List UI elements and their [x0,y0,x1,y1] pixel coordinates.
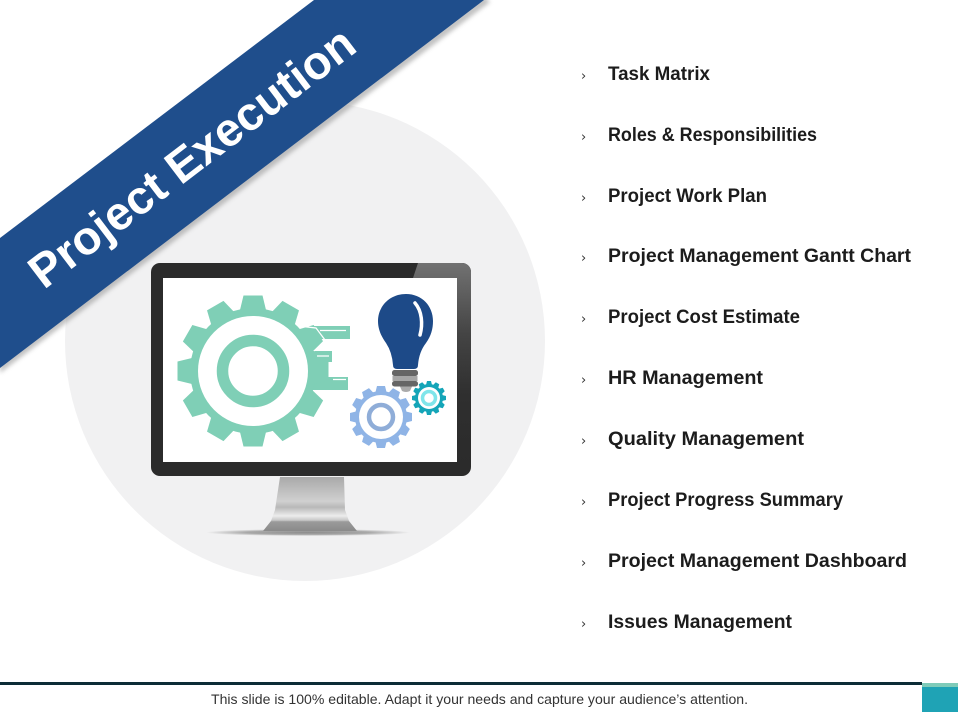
monitor bezel [151,263,471,476]
footer rule [0,682,922,685]
item: Project Cost Estimate: Project Cost Estimate [608,306,800,328]
bulb glass [378,294,433,369]
large green gear [178,296,350,446]
item: Task Matrix: › [581,69,586,84]
banner [0,0,490,373]
item: Project Work Plan: › [581,191,586,206]
item: Roles & Responsibilities: › [581,130,586,145]
gear body [178,296,332,446]
item: Project Management Dashboard: Project Management Dashboard [608,550,907,572]
item: Issues Management: › [581,617,586,632]
monitor gloss [413,263,471,466]
item: Quality Management: › [581,434,586,449]
background circle [65,101,545,581]
item: Project Work Plan: Project Work Plan [608,185,767,207]
footer square [922,683,958,712]
bulb highlight [415,303,422,335]
monitor stand shadow [206,529,410,536]
small blue gear [350,386,412,448]
item: HR Management: HR Management [608,367,764,389]
monitor [151,263,471,536]
item: Project Progress Summary: Project Progress Summary [608,489,843,511]
title: Project Execution [18,16,365,298]
light bulb [378,294,433,392]
item: Quality Management: Quality Management [608,428,805,450]
item: Roles & Responsibilities: Roles & Responsibilities [608,124,817,146]
footer note: This slide is 100% editable. Adapt it your needs and capture your audience’s attention. [211,691,748,707]
item: Project Management Gantt Chart: › [581,251,586,266]
monitor screen [163,278,457,462]
footer [0,682,958,712]
item: Project Progress Summary: › [581,495,586,510]
gear data tabs [312,326,350,390]
banner ribbon [0,0,484,368]
item: Project Management Dashboard: › [581,556,586,571]
item: HR Management: › [581,373,586,388]
item: Task Matrix: Task Matrix [608,63,710,85]
item: Project Management Gantt Chart: Project Management Gantt Chart [608,245,911,267]
monitor stand [263,477,357,531]
item: Issues Management: Issues Management [608,611,792,633]
item: Project Cost Estimate: › [581,312,586,327]
bulb screw base [392,370,418,392]
banner shadow [0,0,490,373]
topic list [581,63,911,633]
small teal gear [412,381,446,415]
